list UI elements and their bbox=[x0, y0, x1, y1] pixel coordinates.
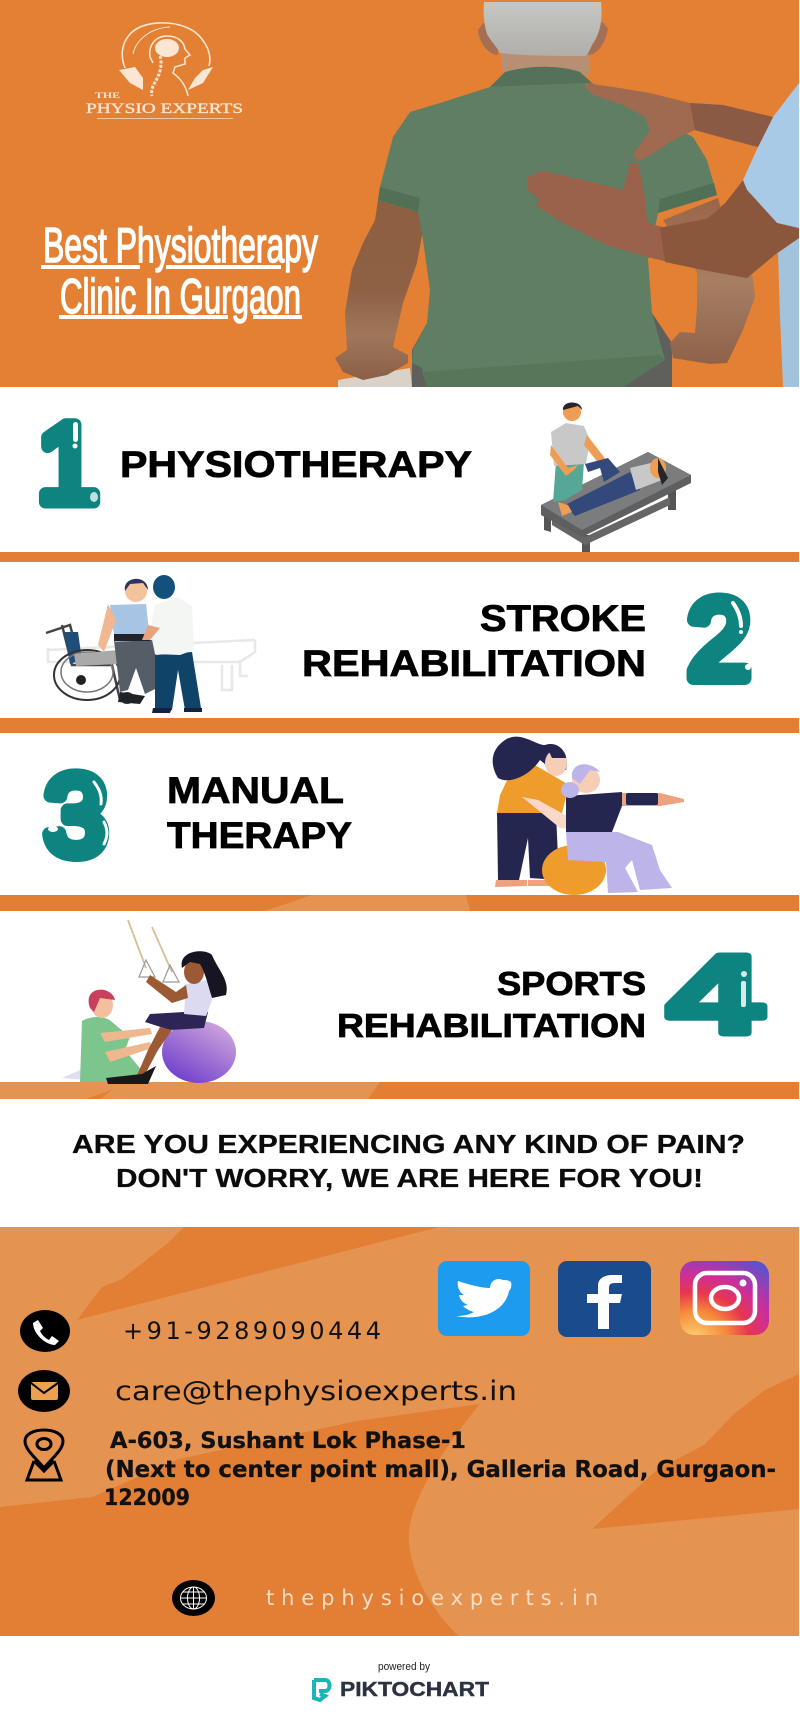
icon: phone bbox=[20, 1310, 70, 1352]
trousers bbox=[412, 313, 672, 387]
website: thephysioexperts.in bbox=[266, 1586, 598, 1610]
heading: REHABILITATION bbox=[302, 643, 646, 684]
heading: REHABILITATION bbox=[337, 1007, 646, 1044]
icon: piktochart logo bbox=[314, 1680, 330, 1700]
panel: contact bbox=[0, 1227, 799, 1636]
patient bbox=[145, 1012, 208, 1030]
therapist scrubs bbox=[743, 83, 799, 228]
man's left arm bbox=[335, 200, 423, 380]
title: Best Physiotherapy bbox=[43, 219, 318, 273]
heading bbox=[337, 965, 646, 1044]
icon: globe bbox=[172, 1580, 215, 1616]
band with light patch bbox=[0, 895, 799, 911]
therapist bbox=[155, 652, 201, 710]
towel bbox=[338, 368, 412, 387]
shirt bbox=[378, 83, 717, 387]
address: (Next to center point mall), Galleria Road, Gurgaon- bbox=[105, 1457, 776, 1483]
logo bbox=[86, 23, 243, 119]
address: 122009 bbox=[104, 1486, 190, 1511]
footer: powered by piktochart: PIKTOCHART bbox=[340, 1679, 489, 1701]
heading: SPORTS bbox=[497, 965, 646, 1002]
question text: DON'T WORRY, WE ARE HERE FOR YOU! bbox=[116, 1163, 703, 1193]
panel: manual therapy bbox=[45, 737, 684, 895]
phone number: +91-9289090444 bbox=[123, 1317, 381, 1345]
title bbox=[41, 219, 318, 324]
email address: care@thephysioexperts.in bbox=[115, 1376, 517, 1407]
question text bbox=[72, 1129, 745, 1193]
hair bbox=[484, 2, 602, 56]
heading bbox=[302, 598, 646, 684]
icon: email bbox=[18, 1370, 70, 1412]
footer: powered by piktochart bbox=[314, 1661, 489, 1701]
man's right arm bbox=[663, 198, 755, 364]
number 2: 2 bbox=[688, 577, 750, 702]
heading: THERAPY bbox=[167, 815, 352, 856]
logo: THE bbox=[95, 91, 120, 100]
ears bbox=[478, 22, 608, 55]
icon: facebook bbox=[558, 1261, 651, 1337]
footer: powered by piktochart: powered by bbox=[378, 1661, 430, 1673]
number 4 bbox=[667, 932, 763, 1057]
illustration: therapist with patient on ball bbox=[493, 737, 684, 895]
icon: instagram bbox=[680, 1261, 769, 1335]
number 1: 1 bbox=[37, 401, 99, 526]
therapist upper hand bbox=[585, 83, 773, 161]
panel: physiotherapy bbox=[37, 401, 691, 552]
title: Clinic In Gurgaon bbox=[60, 270, 301, 324]
band bbox=[0, 718, 799, 733]
band bbox=[0, 552, 799, 562]
icon: twitter bbox=[438, 1261, 530, 1336]
illustration: patient on exercise ball with ropes bbox=[62, 920, 236, 1084]
therapist lower hand and arm bbox=[527, 163, 799, 278]
therapist bbox=[553, 462, 584, 502]
illustration: therapist and patient on table bbox=[541, 402, 691, 552]
question text: ARE YOU EXPERIENCING ANY KIND OF PAIN? bbox=[72, 1129, 745, 1159]
heading: PHYSIOTHERAPY bbox=[120, 444, 472, 485]
number 4: 4 bbox=[667, 932, 763, 1057]
address bbox=[104, 1429, 776, 1511]
heading bbox=[167, 770, 352, 856]
patient bbox=[114, 640, 157, 694]
band with light patch bbox=[0, 1082, 799, 1099]
panel: stroke rehabilitation bbox=[46, 575, 756, 713]
illustration: therapist helping patient from wheelchair bbox=[46, 575, 255, 713]
address: A-603, Sushant Lok Phase-1 bbox=[110, 1429, 466, 1454]
neck bbox=[500, 50, 590, 75]
logo: PHYSIO EXPERTS bbox=[86, 101, 243, 117]
patient bbox=[565, 472, 640, 516]
photo: patient and therapist bbox=[335, 2, 799, 387]
heading: STROKE bbox=[480, 598, 646, 639]
heading: MANUAL bbox=[167, 770, 344, 811]
icon: location pin bbox=[25, 1430, 63, 1480]
panel: sports rehabilitation bbox=[62, 920, 763, 1084]
number 3: 3 bbox=[45, 753, 107, 878]
header panel bbox=[0, 0, 799, 387]
therapist bbox=[80, 1017, 143, 1082]
